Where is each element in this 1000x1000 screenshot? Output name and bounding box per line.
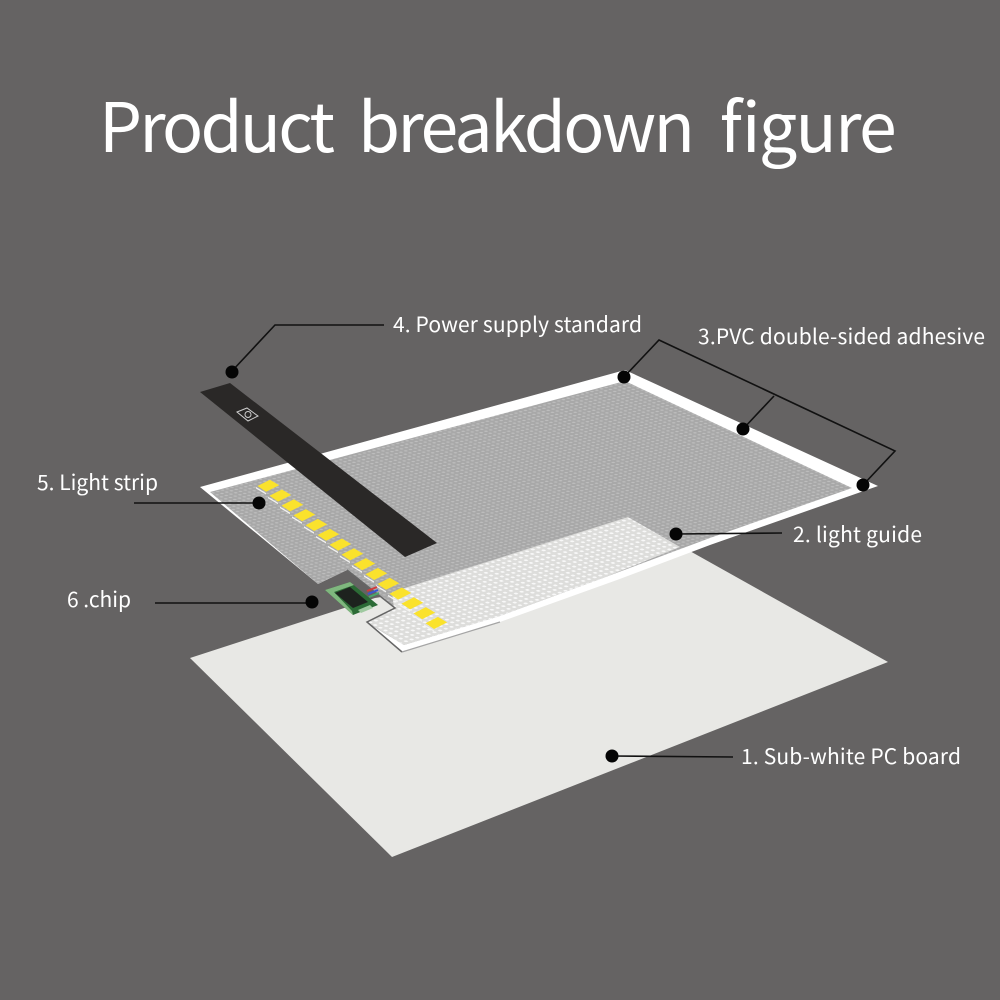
icon: touch button — [237, 408, 258, 421]
callout 1: sub-white PC board: 1. Sub-white PC board — [741, 741, 961, 771]
light strip LEDs — [256, 480, 447, 632]
callout 5: light strip: 5. Light strip — [37, 467, 158, 497]
callout 3: PVC double-sided adhesive: 3.PVC double-sided adhesive — [698, 321, 985, 351]
callout 4: power supply standard — [226, 309, 642, 378]
band shadow — [402, 622, 500, 652]
callout 2: light guide — [670, 519, 922, 549]
panel: light guide plate — [200, 370, 878, 652]
title: breakdown — [358, 73, 695, 172]
callout 4: power supply standard: 4. Power supply standard — [393, 309, 642, 339]
power supply strip — [200, 383, 437, 557]
lighter dotted sheet — [367, 517, 680, 645]
dotted grey sheet — [210, 381, 852, 645]
title: figure — [720, 73, 897, 172]
chip — [325, 582, 379, 615]
callout 2: light guide: 2. light guide — [793, 519, 922, 549]
callout 6: chip — [67, 584, 318, 614]
callout 1: sub-white PC board — [606, 741, 961, 771]
white adhesive frame — [200, 370, 878, 652]
callout 6: chip: 6 .chip — [67, 584, 131, 614]
panel: sub-white PC board — [190, 550, 888, 857]
callout 5: light strip — [37, 467, 266, 510]
wire edge — [347, 570, 402, 652]
title: Product — [99, 73, 335, 172]
callout 3: PVC double-sided adhesive — [618, 321, 985, 492]
